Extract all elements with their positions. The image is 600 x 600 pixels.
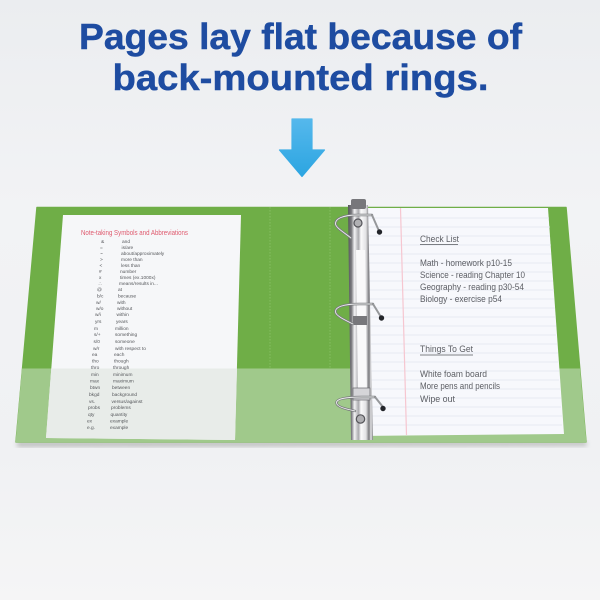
- symbols list: example: [110, 418, 128, 424]
- symbols list: times (ex.1000x): [120, 275, 156, 281]
- check list notes: Biology - exercise p54: [420, 294, 502, 304]
- symbols list: ~: [100, 252, 103, 257]
- things to get notes: White foam board: [420, 369, 487, 379]
- symbols list: million: [115, 326, 129, 332]
- symbols list: versus/against: [112, 399, 143, 405]
- ring mechanism: [335, 199, 386, 440]
- symbols list: s/+: [94, 332, 101, 338]
- symbols list: number: [120, 269, 137, 275]
- things underline: [420, 354, 473, 356]
- ring: top: [335, 215, 379, 238]
- symbols list: someone: [115, 340, 135, 345]
- symbols list: quantity: [110, 412, 128, 418]
- middle clasp: [353, 316, 367, 325]
- check list notes: [420, 234, 525, 304]
- top cap: [351, 199, 366, 209]
- ruled lines: [360, 218, 562, 425]
- left page: [46, 215, 241, 440]
- center highlight: [356, 250, 367, 395]
- symbols list: max: [90, 380, 100, 384]
- check list notes: Check List: [420, 234, 459, 244]
- symbols list: without: [117, 306, 133, 312]
- symbols list: min: [91, 372, 99, 378]
- symbols list: w/o: [96, 306, 104, 312]
- check list notes: Geography - reading p30-54: [420, 282, 524, 292]
- symbols list: <: [100, 263, 102, 269]
- symbols list: through: [113, 365, 130, 371]
- symbols list: problems: [111, 405, 131, 411]
- symbols list: because: [118, 294, 136, 300]
- symbols list: with: [117, 300, 126, 306]
- symbols list: tho: [92, 358, 99, 364]
- metal backbone: [348, 205, 373, 440]
- margin line: [400, 208, 406, 435]
- symbols list: example: [110, 425, 128, 431]
- symbols list: means/results in...: [119, 281, 158, 287]
- things to get notes: More pens and pencils: [420, 381, 500, 391]
- symbols list: bkgd: [89, 392, 100, 398]
- symbols list: more than: [121, 257, 143, 263]
- symbols list: >: [100, 257, 103, 263]
- symbols list: between: [112, 385, 130, 391]
- symbols list: at: [118, 287, 123, 293]
- green cover: [16, 208, 586, 442]
- symbols list: qty: [88, 412, 95, 418]
- symbols list: &: [101, 239, 105, 245]
- binder shadow: [17, 441, 587, 447]
- bottom rivet: [356, 415, 365, 423]
- ring: bottom: [336, 397, 383, 411]
- check list underline: [420, 244, 458, 246]
- symbols list: e.g.: [87, 426, 95, 431]
- ring tip: middle: [379, 315, 384, 321]
- spine creases: [270, 207, 330, 369]
- symbols list: ea: [92, 353, 98, 358]
- title: Pages lay flat because of: [79, 16, 523, 57]
- symbols list: each: [114, 352, 125, 358]
- symbols list: years: [116, 319, 128, 325]
- ring: middle: [335, 304, 381, 324]
- check list notes: Math - homework p10-15: [420, 258, 512, 268]
- arrow pointing down: [280, 119, 324, 176]
- symbols list: minimum: [113, 372, 132, 378]
- things to get notes: Wipe out: [420, 394, 455, 404]
- symbols list: s/0: [94, 339, 100, 345]
- symbols list: maximum: [113, 378, 134, 384]
- symbols list: thro: [91, 365, 100, 371]
- symbols list: w/i: [95, 312, 101, 318]
- right lined page: [356, 208, 564, 436]
- symbols list: m: [94, 327, 98, 332]
- symbols list: within: [116, 312, 129, 318]
- pocket tint on left page: [46, 368, 237, 440]
- symbols list: yrs: [95, 319, 102, 325]
- open binder: [16, 207, 586, 442]
- symbols list: vs.: [89, 400, 95, 405]
- top rivet: [354, 219, 362, 227]
- things to get notes: Things To Get: [420, 344, 473, 354]
- symbols list: btwn: [90, 385, 100, 391]
- pocket: [16, 368, 586, 442]
- note heading: Note-taking Symbols and Abbreviations: [81, 228, 188, 237]
- symbols list: something: [115, 332, 137, 338]
- symbols list: ex: [87, 420, 93, 424]
- symbols list: background: [112, 392, 137, 398]
- symbols list: @: [97, 287, 102, 293]
- symbols list: [87, 239, 165, 431]
- symbols list: though: [114, 358, 129, 364]
- title: [79, 16, 523, 98]
- symbols list: w/r: [93, 346, 100, 352]
- symbols list: and: [122, 239, 130, 245]
- title: back-mounted rings.: [112, 57, 488, 98]
- things to get notes: [420, 344, 500, 404]
- symbols list: about/approximately: [121, 251, 165, 257]
- symbols list: =: [100, 246, 103, 251]
- symbols list: b/c: [97, 294, 104, 300]
- symbols list: is/are: [122, 245, 134, 251]
- symbols list: with respect to: [115, 346, 146, 352]
- ring tip: top: [377, 229, 382, 235]
- symbols list: #: [99, 269, 102, 275]
- symbols list: probs: [88, 405, 101, 411]
- symbols list: w/: [96, 300, 101, 306]
- ring tip: bottom: [380, 406, 386, 411]
- symbols list: ∴: [98, 282, 102, 287]
- symbols list: less than: [121, 263, 141, 269]
- symbols list: x: [99, 276, 102, 281]
- bottom clasp: [353, 388, 370, 400]
- check list notes: Science - reading Chapter 10: [420, 270, 525, 280]
